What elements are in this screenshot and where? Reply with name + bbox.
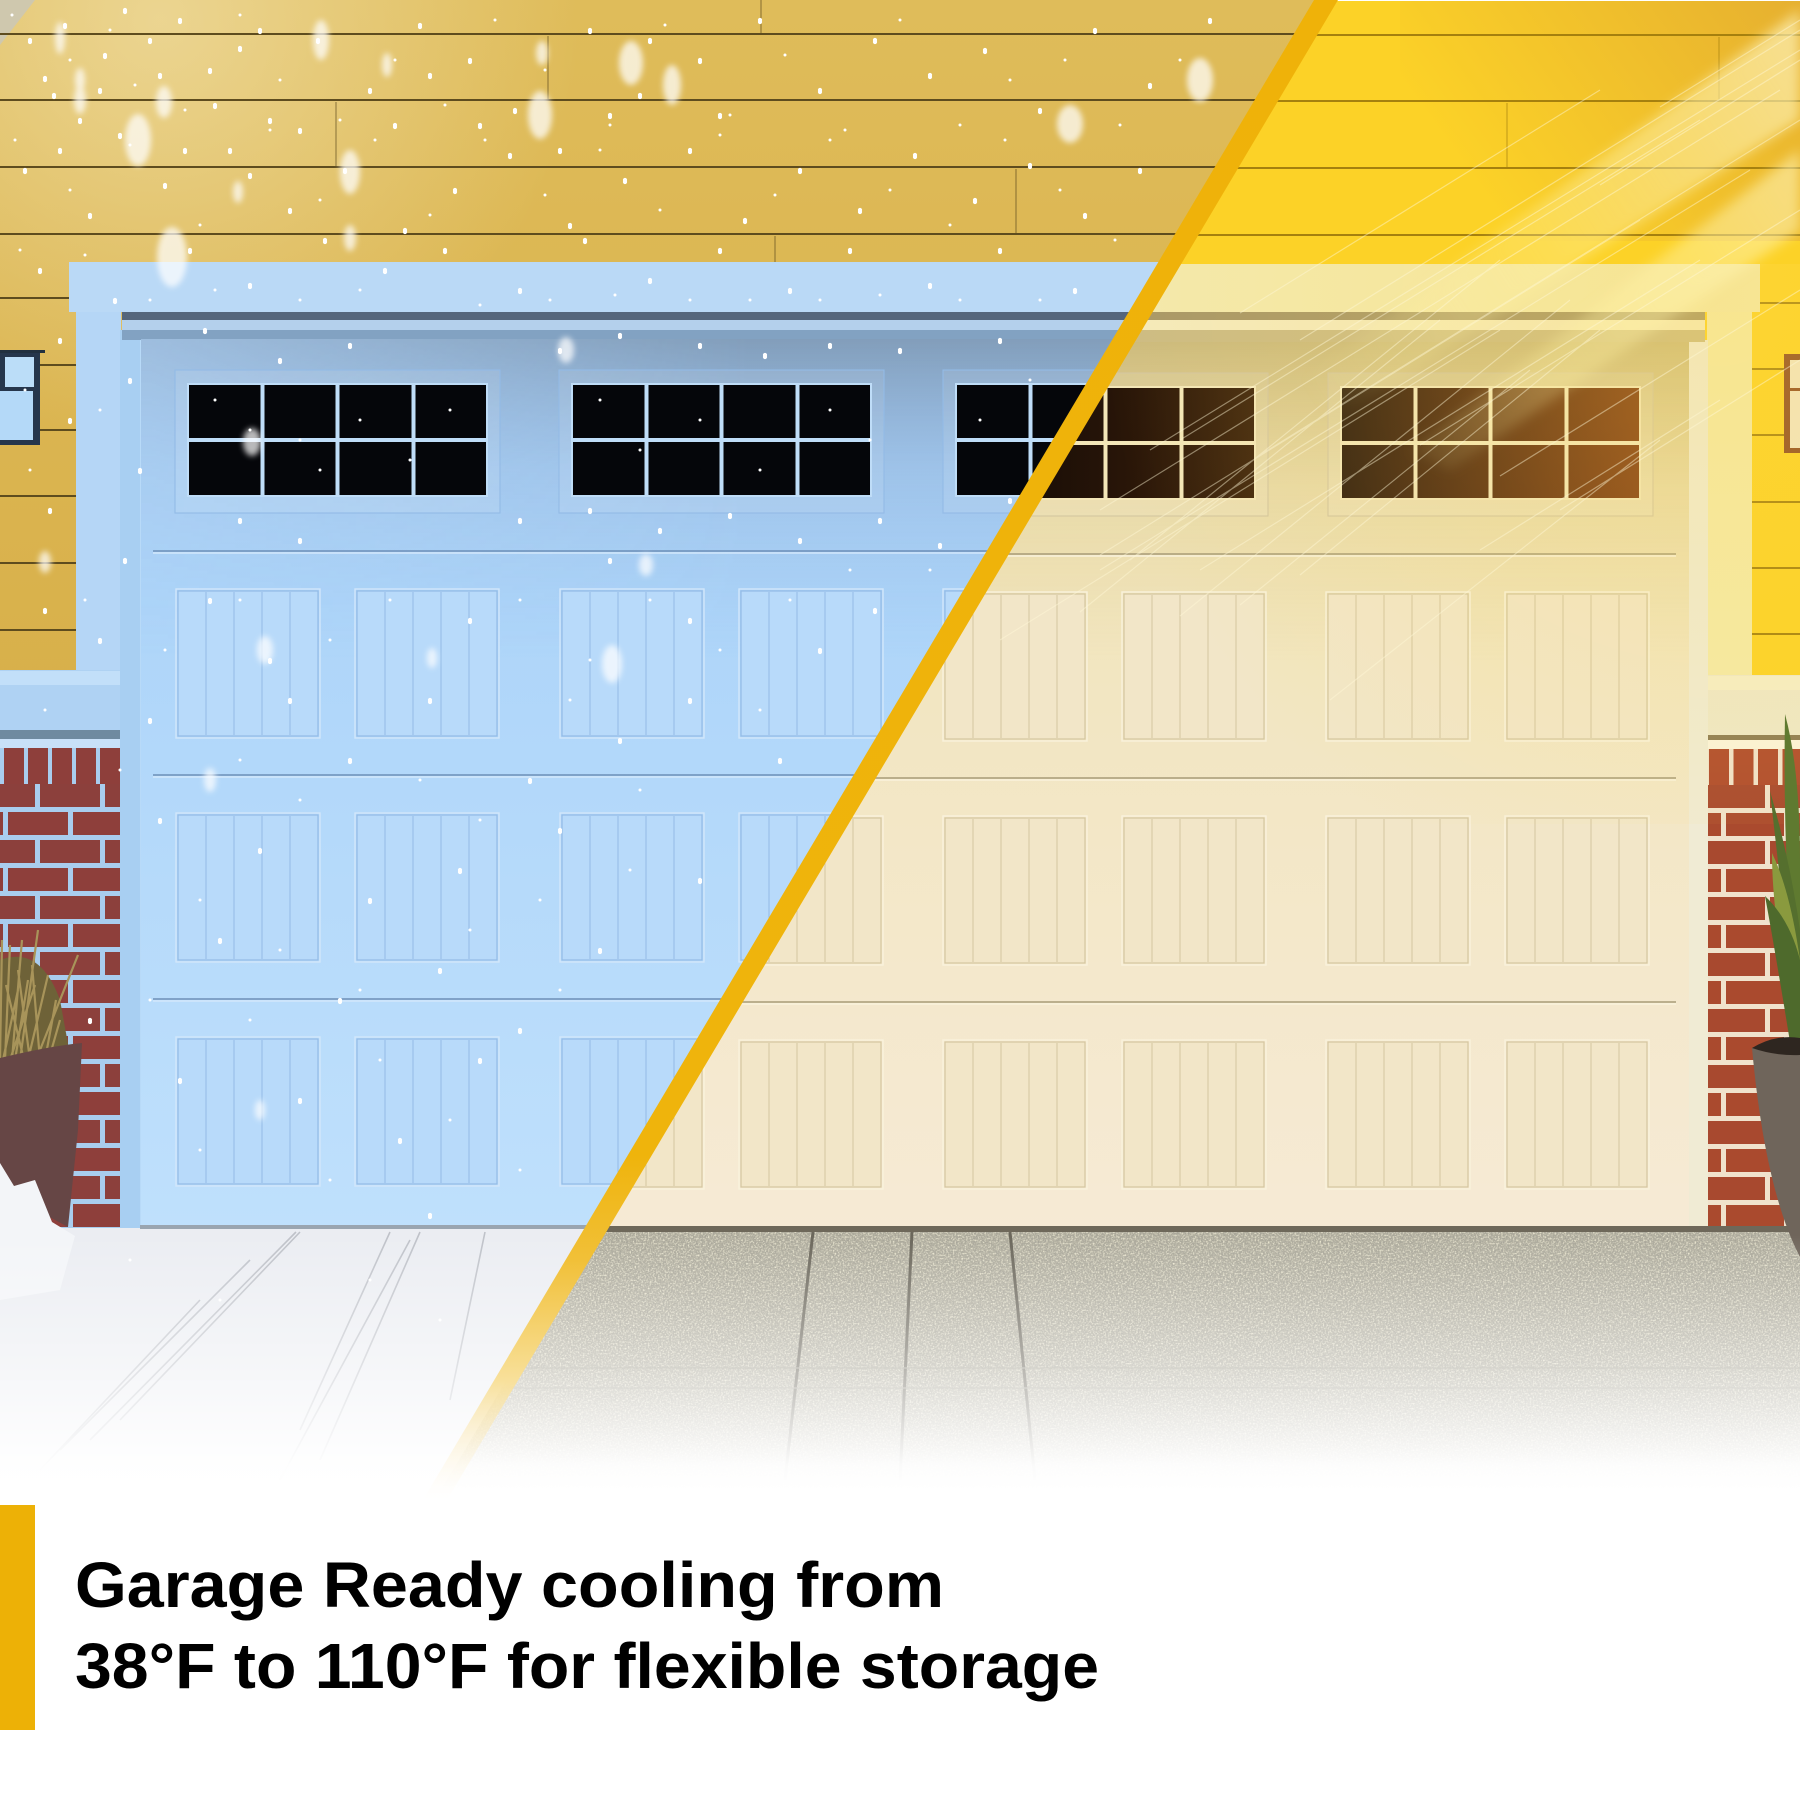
large blurred snowflakes <box>39 20 1213 1120</box>
cold brick wall <box>0 748 122 1230</box>
warm brick wall <box>1707 749 1800 1230</box>
snow pile <box>0 1163 62 1228</box>
warm plant pot and snake plant <box>1752 714 1800 1257</box>
panel: cold winter half of garage <box>0 0 1314 1444</box>
warm garage door <box>610 342 1689 1226</box>
panel: warm summer half of garage <box>475 1 1800 1462</box>
cold plant pot and dried grass <box>0 930 82 1227</box>
warm lamp <box>1784 354 1800 453</box>
cold garage door <box>141 339 1112 1225</box>
diagonal yellow divider <box>423 0 1338 1500</box>
warm siding <box>1181 1 1800 675</box>
headline line 1: Garage Ready cooling from <box>75 1549 944 1621</box>
cold door frame and trim <box>69 262 1158 1228</box>
concrete driveway <box>475 1226 1800 1462</box>
yellow accent bar <box>0 1505 35 1730</box>
driveway fade to white <box>0 1235 1800 1491</box>
small snowflakes <box>25 10 1210 1217</box>
cold siding <box>0 0 1314 670</box>
cold wall band above brick <box>0 670 122 748</box>
warm door frame and trim <box>1135 264 1760 1226</box>
warm wall band above brick <box>1707 675 1800 749</box>
soft sun beams <box>1348 7 1800 468</box>
headline line 2: 38°F to 110°F for flexible storage <box>75 1630 1099 1702</box>
tiny snowflakes <box>12 15 1180 1320</box>
headline <box>75 1549 1099 1702</box>
warm glow on upper right of door <box>1202 264 1800 796</box>
snowy driveway <box>0 1225 586 1444</box>
sun rays <box>1000 20 1800 700</box>
cold lamp <box>0 350 45 445</box>
